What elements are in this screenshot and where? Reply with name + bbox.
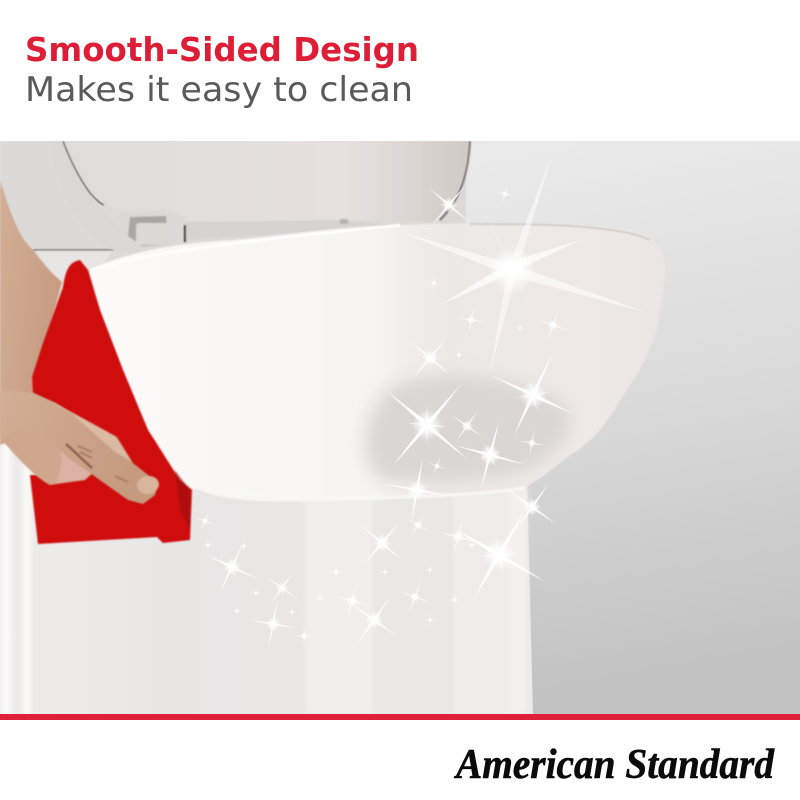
title (25, 30, 419, 110)
large star sparkle on rim (400, 155, 645, 372)
open toilet lid (33, 141, 470, 285)
red divider bar (0, 714, 800, 720)
hand holding cloth: arm (0, 180, 62, 446)
logo: American Standard: American Standard (453, 742, 775, 788)
curled finger and palm (4, 432, 92, 486)
pedestal (0, 440, 533, 714)
hand fingers (0, 390, 160, 504)
sparkles (190, 155, 645, 660)
red cleaning cloth (30, 260, 192, 544)
photo panel: toilet being wiped (0, 141, 800, 714)
toilet bowl (90, 223, 665, 501)
toilet tank and wall behind lid (0, 141, 466, 271)
subheading: Makes it easy to clean: Makes it easy to clean (25, 70, 413, 110)
photo backdrop (0, 141, 800, 714)
heading: Smooth-Sided Design: Smooth-Sided Design (25, 30, 419, 69)
